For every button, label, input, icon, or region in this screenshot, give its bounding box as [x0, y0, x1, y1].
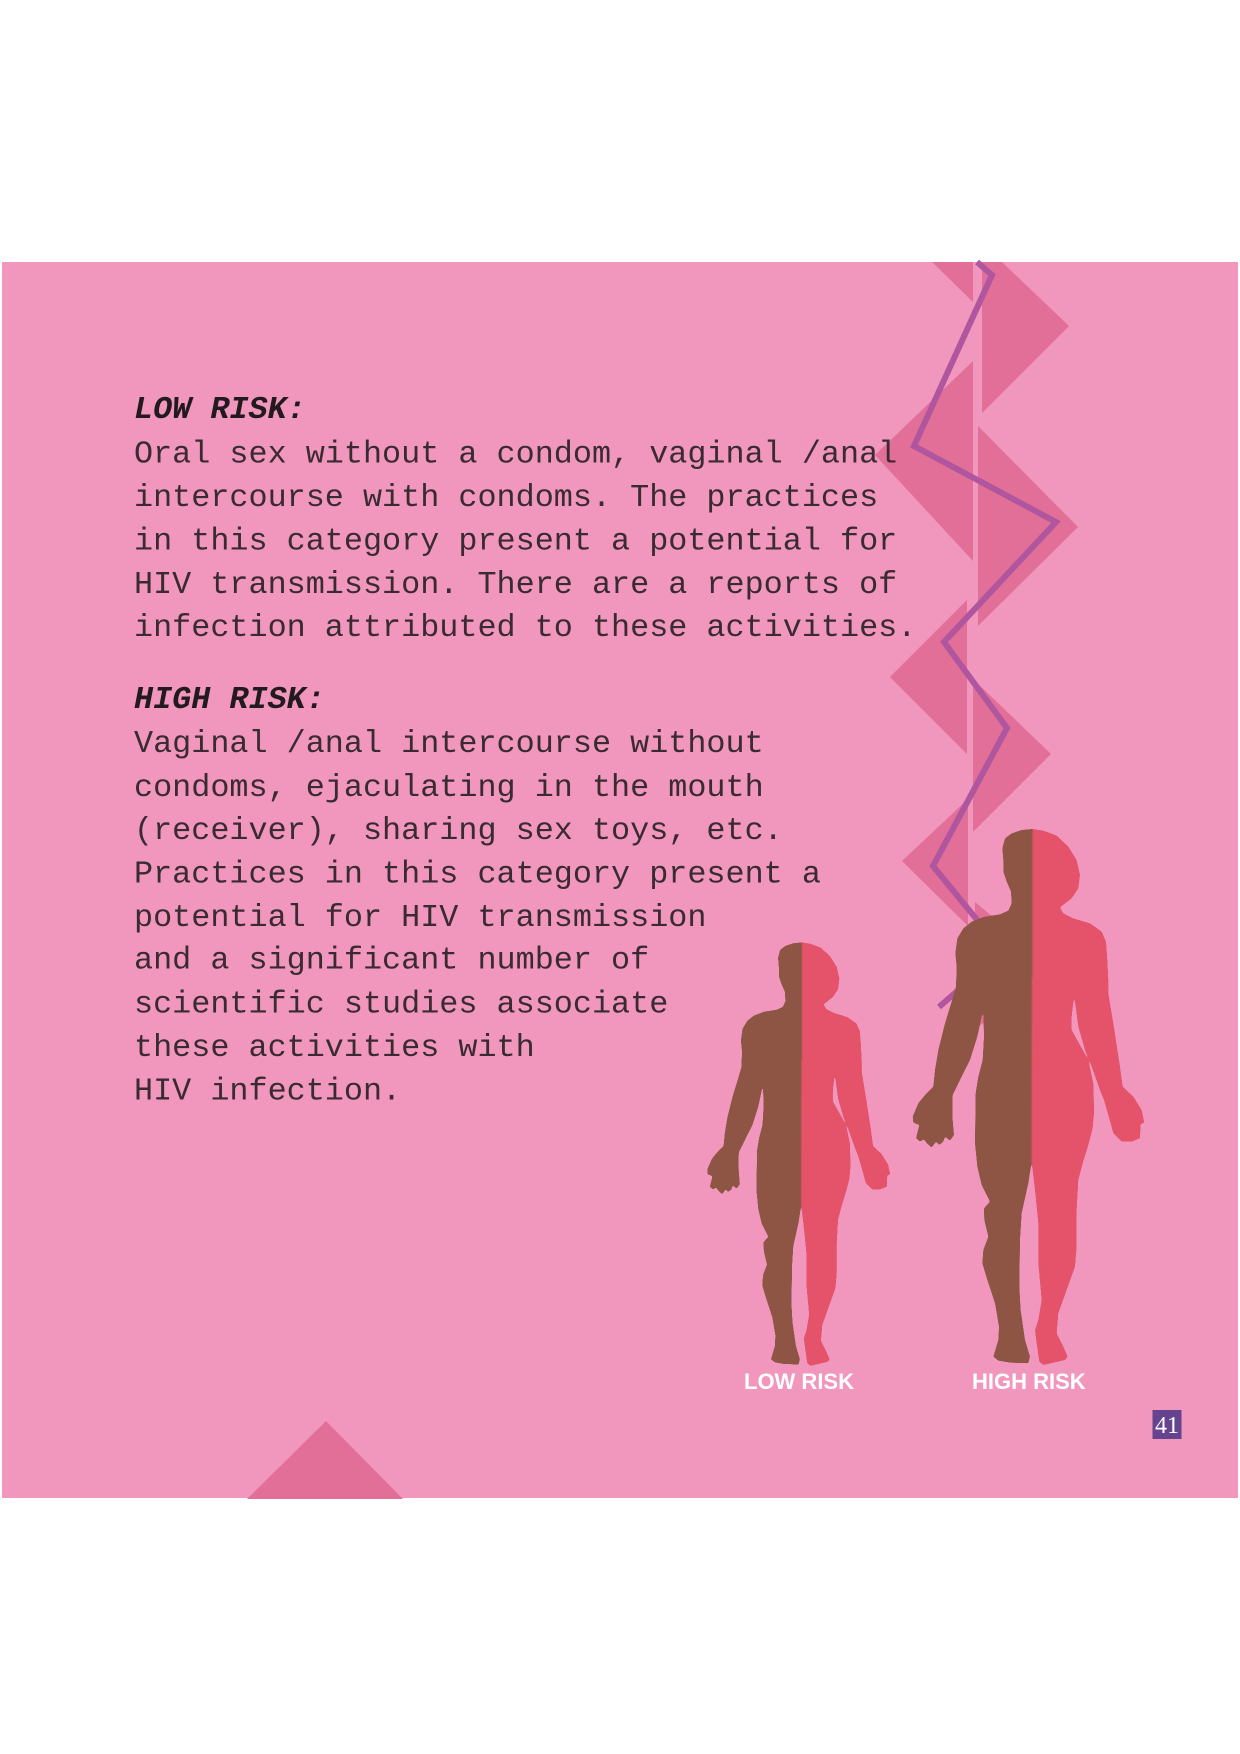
heading: low risk: LOW RISK: — [134, 392, 306, 428]
paragraph: low risk: intercourse with condoms. The practices — [134, 480, 878, 516]
paragraph: high risk: scientific studies associate — [134, 986, 668, 1022]
paragraph: high risk: condoms, ejaculating in the mouth — [134, 770, 764, 806]
paragraph: high risk: Practices in this category present a — [134, 856, 821, 892]
paragraph: low risk: in this category present a potential for — [134, 523, 897, 559]
figure: low risk body silhouette — [707, 942, 890, 1366]
paragraph: high risk: and a significant number of — [134, 943, 649, 979]
paragraph: high risk: Vaginal /anal intercourse without — [134, 726, 764, 762]
low risk text block — [134, 392, 916, 646]
paragraph: high risk: potential for HIV transmission — [134, 900, 706, 936]
decorative triangles column — [875, 262, 1078, 1030]
paragraph: low risk — [134, 437, 916, 646]
paragraph: low risk: Oral sex without a condom, vaginal /anal — [134, 437, 897, 473]
figure: high risk body silhouette — [913, 829, 1144, 1365]
paragraph: low risk: infection attributed to these activities. — [134, 610, 916, 646]
paragraph: high risk: HIV infection. — [134, 1073, 401, 1109]
zigzag line — [914, 262, 1056, 1007]
paragraph: high risk — [134, 726, 821, 1109]
bottom triangle — [247, 1421, 403, 1499]
paragraph: low risk: HIV transmission. There are a reports of — [134, 567, 897, 603]
label: low risk: LOW RISK — [744, 1369, 854, 1394]
paragraph: high risk: (receiver), sharing sex toys, etc. — [134, 813, 783, 849]
heading: high risk: HIGH RISK: — [134, 682, 325, 718]
page number box: 41 — [1155, 1413, 1179, 1439]
paragraph: high risk: these activities with — [134, 1030, 535, 1066]
label: high risk: HIGH RISK — [972, 1369, 1086, 1394]
pink page panel — [2, 262, 1238, 1498]
high risk text block — [134, 682, 821, 1109]
